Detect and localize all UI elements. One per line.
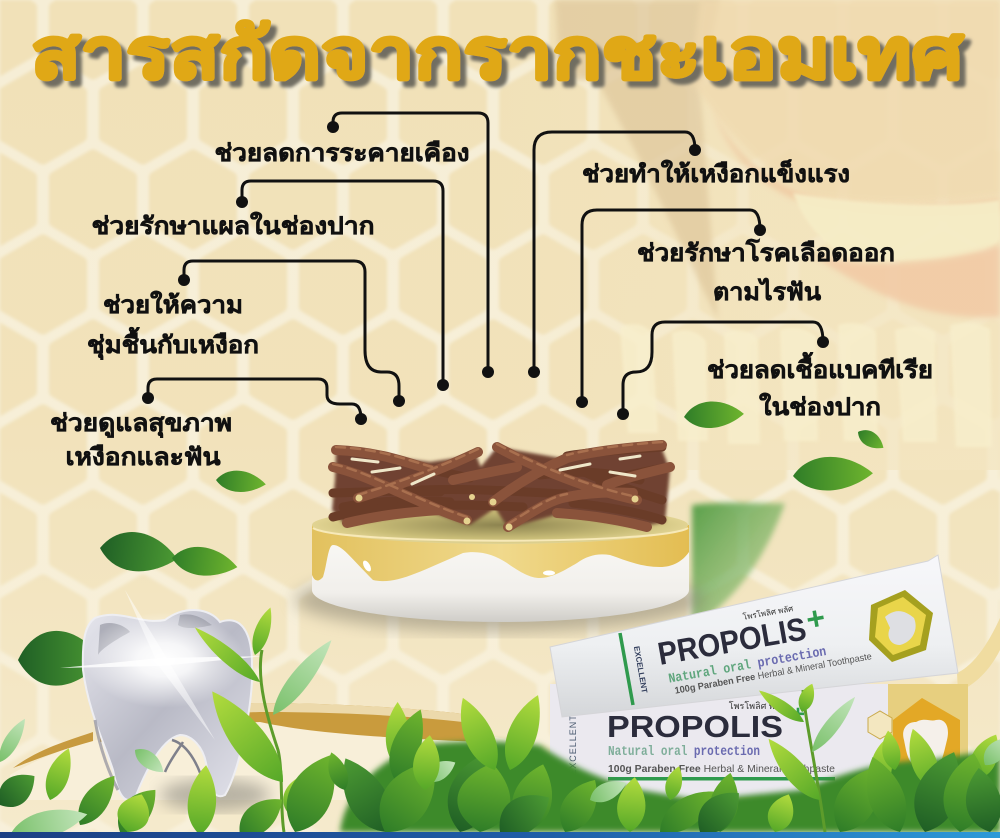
- connector 3: [178, 261, 405, 407]
- toothpaste tube: [550, 555, 958, 717]
- toothpaste tube: 100g Paraben Free Herbal & Mineral Toothpaste: [674, 651, 873, 697]
- box text: [568, 701, 835, 780]
- label: reduce bacteria: ช่วยลดเชื้อแบคทีเรีย: [707, 351, 933, 384]
- tea leaf foreground: [0, 605, 1000, 838]
- box text: EXCELLENT: [568, 714, 578, 776]
- label: reduce irritation: ช่วยลดการระคายเคือง: [214, 140, 470, 167]
- licorice root sticks: [332, 442, 670, 530]
- label: moisturize gums: ชุ่มชื้นกับเหงือก: [87, 326, 259, 361]
- sprig over box: [755, 681, 860, 832]
- label: heal mouth wounds: ช่วยรักษาแผลในช่องปาก: [92, 211, 374, 240]
- box text: +: [791, 701, 805, 728]
- floating green leaves: [97, 400, 888, 628]
- podium with honey drip: [295, 506, 705, 632]
- box text: 100g Paraben Free Herbal & Mineral Toothpaste: [608, 763, 835, 775]
- label: treat bleeding gums: ช่วยรักษาโรคเลือดออก: [637, 238, 895, 267]
- box text: PROPOLIS: [607, 709, 783, 744]
- label: care for gums and teeth: เหงือกและฟัน: [66, 444, 221, 471]
- label: treat bleeding gums: [637, 238, 895, 306]
- toothpaste tube: +: [803, 599, 828, 638]
- title: สารสกัดจากรากชะเอมเทศ: [31, 15, 965, 93]
- cream gaps between sticks: [352, 456, 640, 484]
- benefit labels: [50, 140, 933, 471]
- label: care for gums and teeth: [50, 410, 232, 471]
- label: reduce bacteria: ในช่องปาก: [759, 392, 881, 421]
- box text: Natural oral protection: [608, 745, 760, 760]
- connector 5: [528, 132, 701, 378]
- toothpaste tube: Natural oral protection: [667, 645, 828, 688]
- connector lines with dots: [142, 113, 829, 425]
- icon: honeycomb hexagon: [869, 590, 933, 662]
- box text: โพรโพลิศ พลัศ: [729, 701, 786, 711]
- connector 2: [236, 181, 449, 391]
- toothpaste box: [550, 684, 968, 797]
- connector 1: [327, 113, 494, 378]
- blurred bush mass: [340, 741, 1000, 832]
- icon: shining silver tooth: [18, 590, 265, 800]
- label: reduce bacteria: [707, 351, 933, 421]
- tall tea sprig over tooth: [190, 605, 339, 832]
- toothpaste tube: โพรโพลิศ พลัศ: [742, 603, 794, 622]
- gold swoosh and floor: [10, 618, 1000, 811]
- label: strengthen gums: ช่วยทำให้เหงือกแข็งแรง: [582, 159, 850, 188]
- label: moisturize gums: ช่วยให้ความ: [103, 290, 243, 319]
- low bush: [0, 690, 1000, 838]
- toothpaste tube: EXCELLENT: [632, 645, 649, 694]
- connector 6: [576, 210, 766, 408]
- tube text: PROPOLIS: [655, 610, 809, 672]
- connector 4: [142, 379, 367, 425]
- box honeycomb panel: [868, 684, 968, 790]
- label: moisturize gums: [87, 290, 259, 361]
- connector 7: [617, 322, 829, 420]
- bottom blue bar: [0, 832, 1000, 838]
- label: care for gums and teeth: ช่วยดูแลสุขภาพ: [50, 410, 232, 439]
- label: treat bleeding gums: ตามไรฟัน: [713, 277, 822, 306]
